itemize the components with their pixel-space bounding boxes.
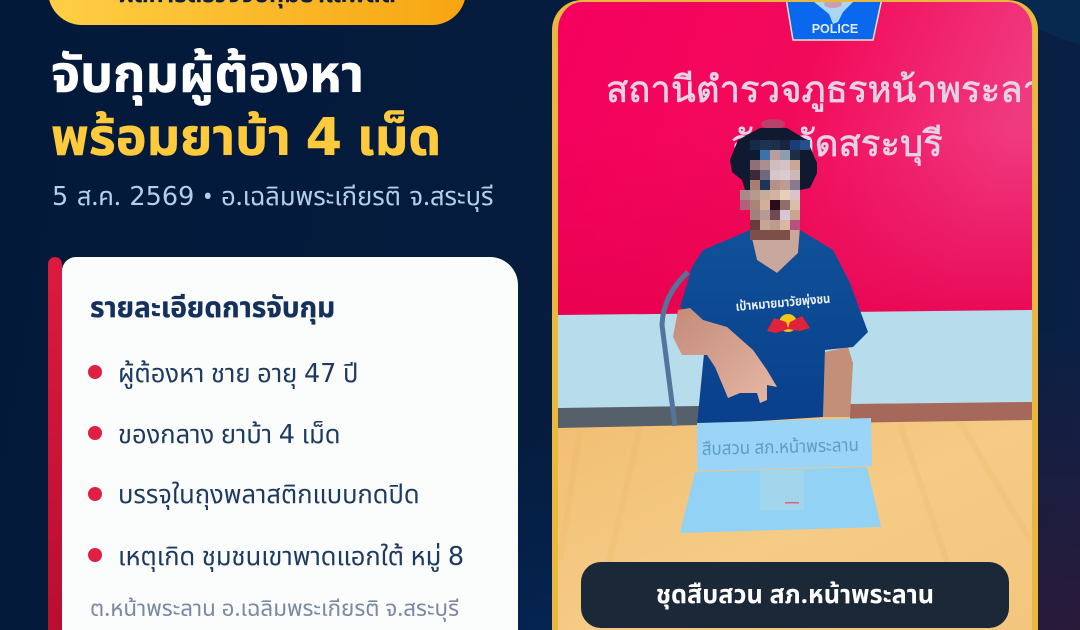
bullet bbox=[88, 426, 102, 440]
title line 1: จับกุมผู้ต้องหา bbox=[51, 38, 364, 116]
baseboard left bbox=[558, 406, 700, 430]
item text: บรรจุในถุงพลาสติกแบบกดปิด bbox=[118, 477, 420, 515]
card body bbox=[62, 257, 518, 630]
right arm bbox=[823, 347, 853, 417]
bullet bbox=[88, 487, 102, 501]
red bull logo bbox=[767, 314, 810, 333]
photo caption bbox=[581, 562, 1009, 628]
police emblem: POLICE bbox=[812, 22, 858, 36]
pixelated face bbox=[740, 140, 810, 240]
item text: เหตุเกิด ชุมชนเขาพาดแอกใต้ หมู่ 8 bbox=[118, 539, 464, 577]
shirt bbox=[680, 230, 868, 425]
card heading: รายละเอียดการจับกุม bbox=[90, 287, 335, 330]
panel: arrest details bbox=[48, 257, 518, 630]
police emblem bbox=[786, 0, 882, 40]
chair bbox=[662, 272, 688, 426]
badge pill bbox=[48, 0, 466, 25]
item text: ของกลาง ยาบ้า 4 เม็ด bbox=[118, 417, 340, 455]
date and location: 5 ส.ค. 2569 • อ.เฉลิมพระเกียรติ จ.สระบุรี bbox=[52, 179, 493, 217]
bullet bbox=[88, 365, 102, 379]
card accent bar bbox=[48, 257, 62, 630]
neck bbox=[750, 226, 800, 273]
backdrop text line 2: จังหวัดสระบุรี bbox=[731, 123, 943, 166]
hair bbox=[730, 119, 817, 190]
item 3 bbox=[88, 477, 420, 515]
caption text: ชุดสืบสวน สภ.หน้าพระลาน bbox=[656, 577, 934, 615]
item 4 bbox=[88, 539, 464, 577]
red backdrop bbox=[558, 2, 1032, 317]
name sign: สืบสวน สภ.หน้าพระลาน bbox=[702, 433, 859, 464]
address line: ต.หน้าพระลาน อ.เฉลิมพระเกียรติ จ.สระบุรี bbox=[90, 593, 459, 627]
photo: suspect at police station bbox=[558, 2, 1032, 533]
photo frame bbox=[552, 0, 1038, 630]
item text: ผู้ต้องหา ชาย อายุ 47 ปี bbox=[118, 356, 358, 394]
person bbox=[673, 119, 868, 425]
left arm and hand bbox=[673, 308, 777, 403]
item 1 bbox=[88, 356, 358, 394]
blue paper with evidence bbox=[680, 467, 881, 533]
wall bbox=[558, 310, 1032, 410]
title line 2: พร้อมยาบ้า 4 เม็ด bbox=[51, 101, 441, 179]
bullet bbox=[88, 548, 102, 562]
shirt text: เป้าหมายมาวัยพุ่งชน bbox=[735, 289, 831, 317]
name sign bbox=[697, 418, 872, 471]
background glow: top right bbox=[960, 0, 1080, 50]
table bbox=[558, 420, 1032, 630]
baseboard right bbox=[850, 402, 1032, 424]
item 2 bbox=[88, 417, 340, 455]
title bbox=[51, 38, 441, 179]
